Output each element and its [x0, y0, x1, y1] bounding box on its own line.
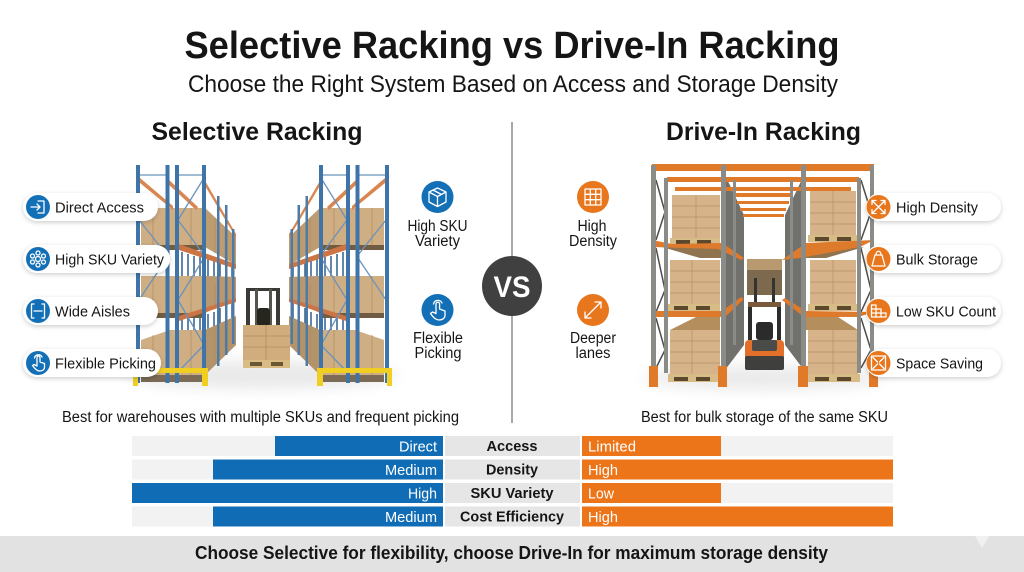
- icon: grid: [585, 189, 601, 205]
- pill: space saving: Space Saving: [896, 356, 983, 372]
- pallet loads, right column: [806, 191, 864, 382]
- row: sku variety: High: [408, 486, 437, 502]
- icon: stacked blocks: [872, 305, 886, 317]
- row: access: Direct: [399, 438, 438, 456]
- callout: deeper lanes: lanes: [576, 345, 611, 362]
- row: cost efficiency: High: [588, 509, 618, 526]
- row: sku variety: Low: [588, 486, 614, 502]
- row: access: Limited: [588, 438, 636, 456]
- callout: flexible picking: Flexible: [413, 330, 463, 347]
- pill: direct access: Direct Access: [55, 200, 144, 216]
- icon: diagonal double arrow: [585, 302, 601, 318]
- row: cost efficiency: Medium: [385, 509, 437, 526]
- callout: high density: [569, 181, 617, 250]
- caption: drive-in: Best for bulk storage of the same SKU: [641, 409, 888, 426]
- icon: box: [429, 188, 446, 206]
- callout: high sku variety: [408, 181, 468, 250]
- callout: deeper lanes: Deeper: [570, 330, 616, 347]
- icon: four-way arrows: [872, 200, 885, 214]
- pill: direct access: [23, 193, 158, 221]
- caption: selective: Best for warehouses with multiple SKUs and frequent picking: [62, 409, 459, 426]
- right selective rack: [289, 165, 392, 386]
- icon: sack: [872, 251, 885, 266]
- pill: bulk storage: Bulk Storage: [896, 252, 978, 268]
- pill: wide aisles: Wide Aisles: [55, 304, 130, 320]
- callout: high density: Density: [569, 233, 617, 250]
- dark lane interior: [725, 175, 804, 370]
- icon: width bracket: [32, 304, 44, 318]
- row: cost efficiency: Cost Efficiency: [460, 510, 564, 526]
- pill: high sku variety: High SKU Variety: [55, 252, 165, 268]
- icon: compress square: [872, 356, 886, 370]
- center divider: [511, 122, 513, 423]
- callout: high density: High: [578, 218, 606, 235]
- forklift with pallet: [243, 288, 290, 368]
- heading: drive-in racking: Drive-In Racking: [666, 118, 861, 146]
- feature pills: selective: [23, 193, 170, 377]
- callout: flexible picking: [413, 294, 463, 362]
- row: density: Medium: [385, 462, 437, 479]
- pallet loads, left column: [662, 195, 722, 382]
- callout: high sku variety: Variety: [415, 233, 460, 250]
- icon: entry arrow: [31, 201, 44, 213]
- row: cost efficiency: [132, 506, 893, 526]
- steel uprights: [651, 165, 874, 373]
- bracing between uprights: [656, 180, 871, 368]
- pill: flexible picking: [23, 349, 161, 377]
- left selective rack: [133, 165, 236, 386]
- footer banner: Choose Selective for flexibility, choose Drive-In for maximum storage density: [195, 543, 828, 563]
- pill: high density: High Density: [896, 200, 979, 216]
- forklift with raised load: [745, 259, 784, 370]
- title: Selective Racking vs Drive-In Racking: [184, 25, 840, 67]
- callout: high sku variety: High SKU: [408, 218, 468, 235]
- row: density: Density: [486, 462, 538, 478]
- icon: tap hand: [430, 300, 445, 320]
- pill: flexible picking: Flexible Picking: [55, 356, 156, 372]
- pill: wide aisles: [23, 297, 158, 325]
- footer banner: [0, 536, 1024, 572]
- pill: bulk storage: [866, 245, 1001, 273]
- row: sku variety: SKU Variety: [470, 486, 554, 502]
- illustration: selective racking aisle with forklift: [128, 165, 398, 389]
- orange post protectors: [649, 366, 878, 387]
- heading: selective racking: Selective Racking: [152, 118, 362, 146]
- pill: high density: [866, 193, 1001, 221]
- row: sku variety: [132, 483, 893, 503]
- orange rail arms: [652, 240, 874, 317]
- subtitle: Choose the Right System Based on Access and Storage Density: [188, 71, 838, 98]
- icon: network: [30, 251, 46, 267]
- row: access: Access: [486, 439, 538, 455]
- illustration: drive-in racking with forklift: [643, 164, 883, 390]
- comparison chart: [132, 436, 893, 526]
- row: density: [132, 460, 893, 480]
- pill: space saving: [866, 349, 1001, 377]
- row: access: [132, 436, 893, 456]
- pill: high sku variety: [23, 245, 170, 273]
- VS badge: [482, 256, 542, 316]
- orange overhead beams: [652, 164, 874, 217]
- feature pills: drive-in: [866, 193, 1001, 377]
- pill: low sku count: [866, 297, 1001, 325]
- callout: flexible picking: Picking: [414, 345, 462, 362]
- row: density: High: [588, 462, 618, 479]
- callout: deeper lanes: [570, 294, 616, 362]
- pill: low sku count: Low SKU Count: [896, 304, 996, 320]
- VS badge: VS: [494, 271, 530, 304]
- icon: tap hand: [32, 355, 44, 371]
